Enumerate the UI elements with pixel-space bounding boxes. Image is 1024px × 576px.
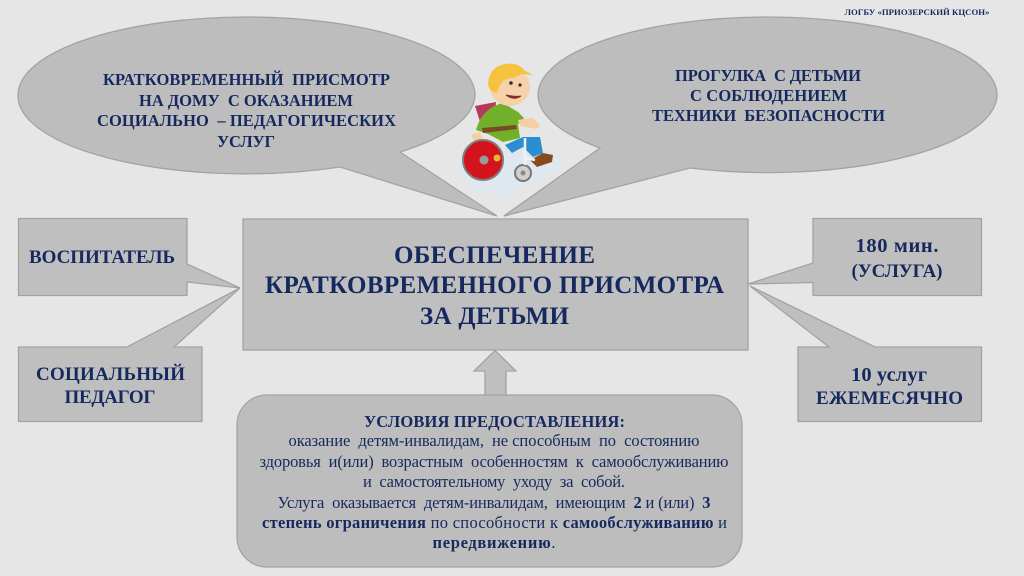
central box: main title: ОБЕСПЕЧЕНИЕ xyxy=(394,242,595,269)
callout: service duration xyxy=(748,218,982,296)
speech bubble: walking with children xyxy=(504,17,997,216)
icon: child in wheelchair xyxy=(455,64,568,198)
arrow: conditions to main box xyxy=(474,350,516,396)
callout: monthly services: ЕЖЕМЕСЯЧНО xyxy=(816,388,963,409)
callout: social pedagogue: СОЦИАЛЬНЫЙ xyxy=(36,363,185,385)
panel: conditions of provision: оказание детям-инвалидам, не способным по состоянию xyxy=(288,431,700,450)
speech bubble: home supervision: СОЦИАЛЬНО – ПЕДАГОГИЧЕСКИХ xyxy=(97,111,396,130)
callout: educator xyxy=(18,218,240,296)
callout: service duration: 180 мин. xyxy=(856,235,938,257)
panel: conditions of provision: и самостоятельному уходу за собой. xyxy=(363,472,625,491)
speech bubble: home supervision: УСЛУГ xyxy=(217,132,275,151)
speech bubble: home supervision: НА ДОМУ С ОКАЗАНИЕМ xyxy=(139,91,353,110)
callout: social pedagogue xyxy=(18,288,240,422)
panel: conditions of provision: Услуга оказывается детям-инвалидам, имеющим 2 и (или) 3 xyxy=(278,493,710,512)
central box: main title: КРАТКОВРЕМЕННОГО ПРИСМОТРА xyxy=(265,272,724,299)
central box: main title: ЗА ДЕТЬМИ xyxy=(420,303,570,330)
callout: monthly services xyxy=(750,286,982,422)
panel: conditions of provision xyxy=(237,395,742,567)
speech bubble: walking with children: С СОБЛЮДЕНИЕМ xyxy=(690,86,847,105)
speech bubble: home supervision xyxy=(18,17,497,216)
speech bubble: home supervision: КРАТКОВРЕМЕННЫЙ ПРИСМОТР xyxy=(103,70,390,89)
panel: conditions of provision: степень ограничения по способности к самообслуживанию и xyxy=(262,513,727,532)
callout: educator: ВОСПИТАТЕЛЬ xyxy=(29,247,175,268)
panel: conditions of provision: здоровья и(или) возрастным особенностям к самообслуживанию xyxy=(260,452,728,471)
speech bubble: walking with children: ПРОГУЛКА С ДЕТЬМИ xyxy=(675,66,861,85)
panel: conditions of provision: УСЛОВИЯ ПРЕДОСТАВЛЕНИЯ: xyxy=(364,412,625,431)
callout: monthly services: 10 услуг xyxy=(851,364,927,386)
callout: service duration: (УСЛУГА) xyxy=(852,261,942,282)
header: organisation name: ЛОГБУ «ПРИОЗЕРСКИЙ КЦСОН» xyxy=(844,7,990,17)
central box: main title xyxy=(243,219,748,350)
callout: social pedagogue: ПЕДАГОГ xyxy=(64,387,156,408)
panel: conditions of provision: передвижению. xyxy=(432,533,556,552)
speech bubble: walking with children: ТЕХНИКИ БЕЗОПАСНОСТИ xyxy=(652,106,885,125)
